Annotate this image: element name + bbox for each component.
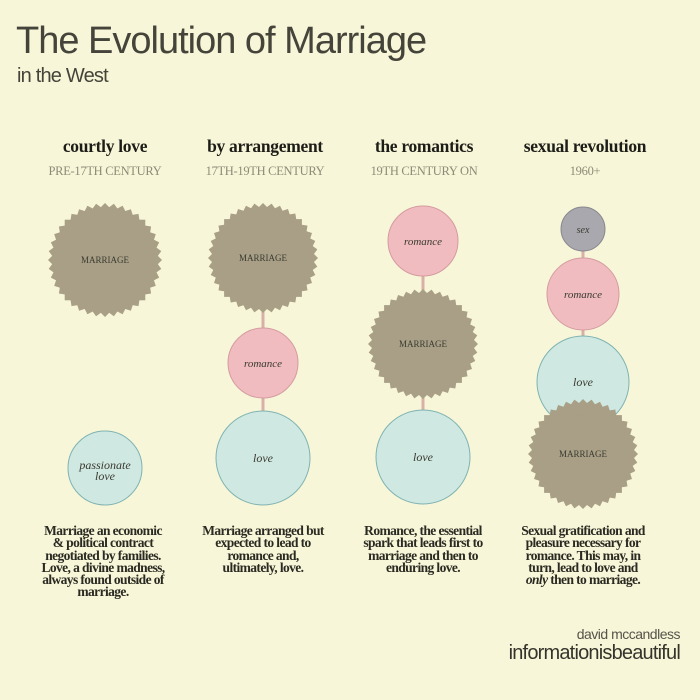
heading: the romantics: 19TH CENTURY ON xyxy=(371,164,477,178)
description: sexual revolution: only then to marriage. xyxy=(526,572,640,587)
column 2: love: love xyxy=(253,451,274,465)
description: courtly love: & political contract xyxy=(53,535,153,550)
column 2: marriage xyxy=(208,203,318,313)
description: sexual revolution: pleasure necessary for xyxy=(526,535,640,550)
column 4: romance xyxy=(547,258,619,330)
heading: by arrangement: 17TH-19TH CENTURY xyxy=(206,164,324,178)
description: courtly love xyxy=(41,523,165,599)
column 4: marriage xyxy=(528,399,638,509)
column 3: marriage xyxy=(368,289,478,399)
description: the romantics: Romance, the essential xyxy=(364,523,482,538)
heading: sexual revolution: sexual revolution xyxy=(524,136,646,156)
heading: by arrangement: by arrangement xyxy=(207,136,323,156)
description: by arrangement xyxy=(202,523,324,575)
column 2: love xyxy=(216,411,310,505)
description: the romantics: spark that leads first to xyxy=(363,535,483,550)
column 4: romance: romance xyxy=(564,289,602,301)
column 4: love xyxy=(537,336,629,428)
column 3: love: love xyxy=(413,450,434,464)
column 1: passionate love: love xyxy=(95,469,116,483)
heading: courtly love: PRE-17TH CENTURY xyxy=(49,164,161,178)
title: The Evolution of Marriage xyxy=(16,20,426,62)
description: courtly love: marriage. xyxy=(77,584,129,599)
description: sexual revolution xyxy=(521,523,646,587)
heading: courtly love xyxy=(48,136,162,178)
column 4: sex xyxy=(561,207,605,251)
column 1: marriage xyxy=(48,203,162,317)
description: by arrangement: Marriage arranged but xyxy=(202,523,324,538)
column 2: marriage: MARRIAGE xyxy=(239,253,287,263)
description: sexual revolution: turn, lead to love and xyxy=(528,560,638,575)
column 2: romance: romance xyxy=(244,358,282,370)
column 4: sex: sex xyxy=(577,225,590,236)
description: courtly love: Marriage an economic xyxy=(44,523,162,538)
description: courtly love: Love, a divine madness, xyxy=(41,560,165,575)
description: the romantics: enduring love. xyxy=(386,560,460,575)
credit: david mccandless xyxy=(577,626,680,642)
column 3: love xyxy=(376,410,470,504)
description: sexual revolution: romance. This may, in xyxy=(526,548,640,563)
description: courtly love: negotiated by families. xyxy=(45,548,161,563)
heading: by arrangement xyxy=(206,136,324,178)
column 1: marriage: MARRIAGE xyxy=(81,255,129,265)
description: by arrangement: romance and, xyxy=(227,548,299,563)
heading: the romantics: the romantics xyxy=(375,136,473,156)
description: by arrangement: ultimately, love. xyxy=(223,560,303,575)
description: by arrangement: expected to lead to xyxy=(215,535,311,550)
subtitle: in the West xyxy=(17,65,108,87)
heading: the romantics xyxy=(371,136,478,178)
column 3: marriage: MARRIAGE xyxy=(399,339,447,349)
column 3: romance: romance xyxy=(404,236,442,248)
column 4: love: love xyxy=(573,375,594,389)
credit: informationisbeautiful xyxy=(509,642,680,664)
description: the romantics: marriage and then to xyxy=(368,548,478,563)
column 1: passionate love: passionate xyxy=(78,458,131,472)
column 2: romance xyxy=(228,328,298,398)
description: the romantics xyxy=(363,523,483,575)
heading: courtly love: courtly love xyxy=(63,136,147,156)
column 3: romance xyxy=(388,206,458,276)
description: sexual revolution: Sexual gratification and xyxy=(521,523,645,538)
description: courtly love: always found outside of xyxy=(42,572,164,587)
column 4: marriage: MARRIAGE xyxy=(559,449,607,459)
credit xyxy=(509,626,680,664)
column 1: passionate love xyxy=(68,431,142,505)
heading: sexual revolution: 1960+ xyxy=(570,164,600,178)
heading: sexual revolution xyxy=(524,136,646,178)
